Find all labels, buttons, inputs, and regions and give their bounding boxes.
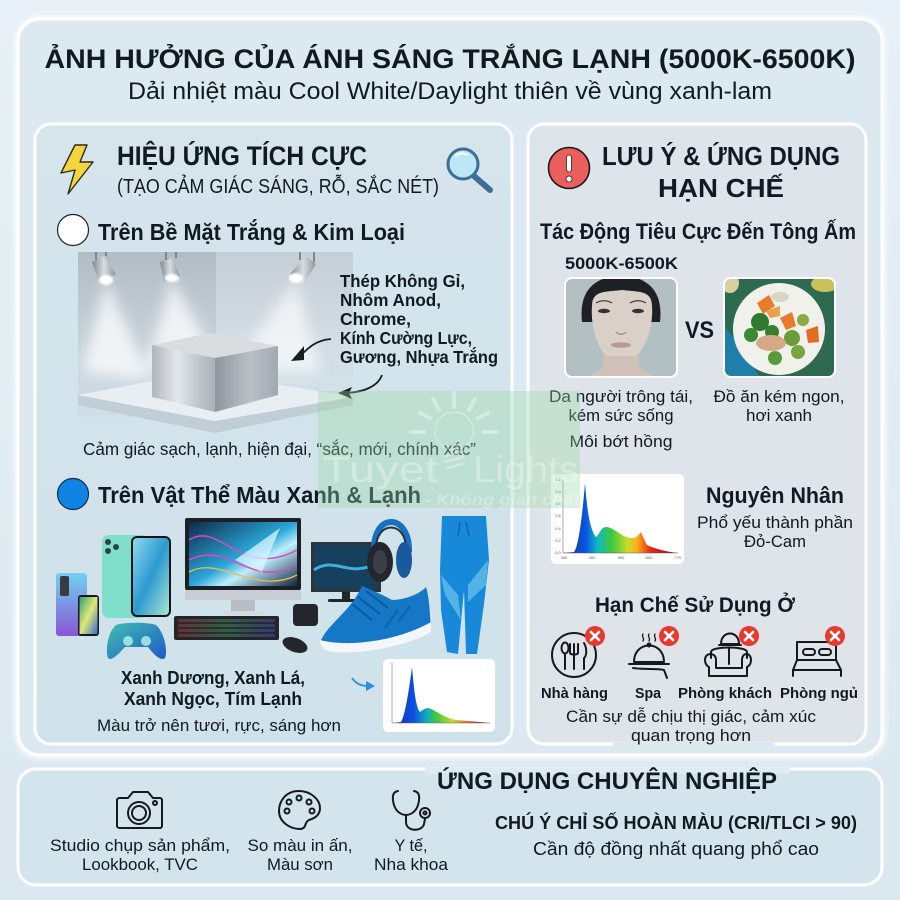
label: materials list: [340, 271, 498, 367]
chart: daylight spectrum: 770: [675, 555, 682, 560]
photo: plate of food: [721, 273, 839, 380]
caption: skin effect: kém sức sống: [568, 406, 674, 425]
chart: daylight spectrum: 1.2: [555, 477, 562, 482]
mini console: [293, 604, 318, 626]
caption: medical: Y tế,: [394, 836, 428, 855]
icon: bed: [793, 626, 845, 676]
caption: skin effect: [549, 387, 693, 451]
labels: limited-use venues: Phòng ngủ: [780, 685, 858, 702]
labels: limited-use venues: Nhà hàng: [541, 685, 608, 702]
chart: daylight spectrum: 300: [561, 555, 568, 560]
heading: cautions: [602, 141, 840, 203]
label: materials list: Chrome,: [340, 309, 411, 329]
icon: lightning bolt: [61, 145, 93, 194]
small phones: [56, 573, 99, 636]
caption: medical: [374, 836, 449, 874]
panel: positive effects: [35, 124, 512, 744]
icon: sofa: [705, 626, 759, 676]
text: limited-use reason: Cần sự dễ chịu thị giác, cảm xúc: [566, 707, 816, 726]
caption: color matching: [248, 836, 352, 874]
label: materials list: Gương, Nhựa Trắng: [340, 346, 498, 367]
caption: color matching: Màu sơn: [267, 855, 333, 874]
arrow: blue to spectrum: [352, 678, 375, 691]
gamepad: [107, 623, 166, 659]
chart: daylight spectrum: 0.0: [555, 550, 562, 555]
teal phones: [102, 535, 171, 618]
icon: stethoscope: [393, 791, 430, 830]
icon: spa cloche: [629, 626, 679, 678]
caption: food effect: [714, 387, 844, 425]
text: cause description: [697, 513, 853, 551]
caption: skin effect: Da người trông tái,: [549, 387, 693, 406]
caption: skin effect: Môi bớt hồng: [570, 432, 672, 451]
caption: cool colors effect: Màu trở nên tươi, rực, sáng hơn: [97, 716, 341, 735]
chart: blue object spectrum: [383, 659, 495, 732]
labels: limited-use venues: Phòng khách: [678, 685, 772, 702]
subheading: negative effects on warm tones: Tác Động Tiêu Cực Đến Tông Ấm: [540, 219, 856, 244]
photo: pale face: [565, 276, 677, 378]
heading: limited use: Hạn Chế Sử Dụng Ở: [595, 593, 795, 617]
caption: white and metal effect: Cảm giác sạch, lạnh, hiện đại, “sắc, mới, chính xác”: [83, 438, 476, 459]
text: limited-use reason: quan trọng hơn: [631, 726, 751, 745]
keyboard: [174, 616, 279, 640]
label: cool colors: Xanh Dương, Xanh Lá,: [121, 668, 305, 688]
icon: white circle bullet: [58, 214, 88, 246]
watermark: - Không gian chất: [425, 492, 581, 509]
note: spectral uniformity: Cần độ đồng nhất quang phổ cao: [533, 839, 819, 859]
caption: medical: Nha khoa: [374, 855, 449, 874]
icon: restaurant: [552, 626, 605, 677]
icon: blue circle bullet: [58, 478, 88, 510]
label: materials list: Kính Cường Lực,: [340, 328, 472, 348]
desktop monitor: [185, 518, 301, 615]
headset: [367, 522, 412, 582]
chart: daylight spectrum: 400: [589, 555, 596, 560]
heading: cause: Nguyên Nhân: [706, 483, 844, 508]
watermark: Lights: [473, 449, 579, 490]
subheading: positive effects: (TẠO CẢM GIÁC SÁNG, RỖ, SẮC NÉT): [117, 174, 439, 198]
mouse: [280, 634, 310, 656]
icon: warning exclamation: [548, 148, 590, 188]
heading: positive effects: HIỆU ỨNG TÍCH CỰC: [117, 140, 367, 171]
icon: magnifier: [448, 149, 490, 190]
watermark: [318, 391, 581, 509]
caption: studio: [50, 836, 230, 874]
label: cool colors: [121, 668, 305, 709]
heading: cautions: HẠN CHẾ: [658, 173, 784, 203]
caption: food effect: Đồ ăn kém ngon,: [714, 387, 844, 406]
watermark: Tuyet: [322, 449, 439, 490]
chart: daylight spectrum: 0.4: [555, 526, 562, 531]
labels: limited-use venues: Spa: [635, 685, 662, 702]
label: cool colors: Xanh Ngọc, Tím Lạnh: [124, 689, 302, 709]
chart: daylight spectrum: [551, 474, 684, 564]
labels: limited-use venues: [541, 685, 858, 702]
running shoe: [320, 586, 431, 652]
heading: white and metal surfaces: Trên Bề Mặt Trắng & Kim Loại: [98, 218, 405, 245]
caption: color matching: So màu in ấn,: [248, 836, 352, 855]
panel: outer header frame: [18, 19, 882, 755]
text: limited-use reason: [566, 707, 816, 745]
illustration: blue devices, shoe and leggings: [56, 516, 489, 659]
leggings: [440, 516, 489, 654]
label: materials list: Nhôm Anod,: [340, 290, 441, 310]
small monitor: [311, 542, 381, 602]
chart: daylight spectrum: 1.0: [555, 489, 562, 494]
label: materials list: Thép Không Gỉ,: [340, 271, 465, 291]
heading: cautions: LƯU Ý & ỨNG DỤNG: [602, 141, 840, 171]
chart: daylight spectrum: 0.6: [555, 513, 562, 518]
text: cause description: Đỏ-Cam: [744, 532, 806, 551]
icon: palette: [279, 791, 320, 829]
panel: cautions and limits: [528, 124, 866, 747]
heading: blue and cool objects: Trên Vật Thể Màu Xanh & Lạnh: [98, 482, 421, 508]
heading: professional applications: ỨNG DỤNG CHUYÊN NGHIỆP: [437, 767, 777, 795]
illustration: metal box on stage with spotlights: [78, 252, 353, 433]
chart: daylight spectrum: 0.8: [555, 501, 562, 506]
arrow: to stage: [338, 375, 382, 399]
label: vs: VS: [685, 317, 714, 344]
caption: studio: Studio chụp sản phẩm,: [50, 836, 230, 855]
chart: daylight spectrum: 600: [646, 555, 653, 560]
note: CRI requirement: CHÚ Ý CHỈ SỐ HOÀN MÀU (CRI/TLCI > 90): [495, 812, 857, 833]
label: color temperature: 5000K-6500K: [565, 254, 679, 273]
caption: food effect: hơi xanh: [746, 406, 812, 425]
arrow: to metal box: [291, 339, 331, 361]
panel: professional applications: [18, 764, 882, 885]
text: cause description: Phổ yếu thành phần: [697, 513, 853, 532]
chart: daylight spectrum: 0.2: [555, 538, 562, 543]
caption: studio: Lookbook, TVC: [82, 855, 198, 874]
chart: daylight spectrum: 500: [618, 555, 625, 560]
subtitle: Dải nhiệt màu Cool White/Daylight thiên về vùng xanh-lam: [128, 78, 772, 105]
title: ẢNH HƯỞNG CỦA ÁNH SÁNG TRẮNG LẠNH (5000K-6500K): [44, 42, 856, 74]
icon: camera: [117, 792, 162, 828]
